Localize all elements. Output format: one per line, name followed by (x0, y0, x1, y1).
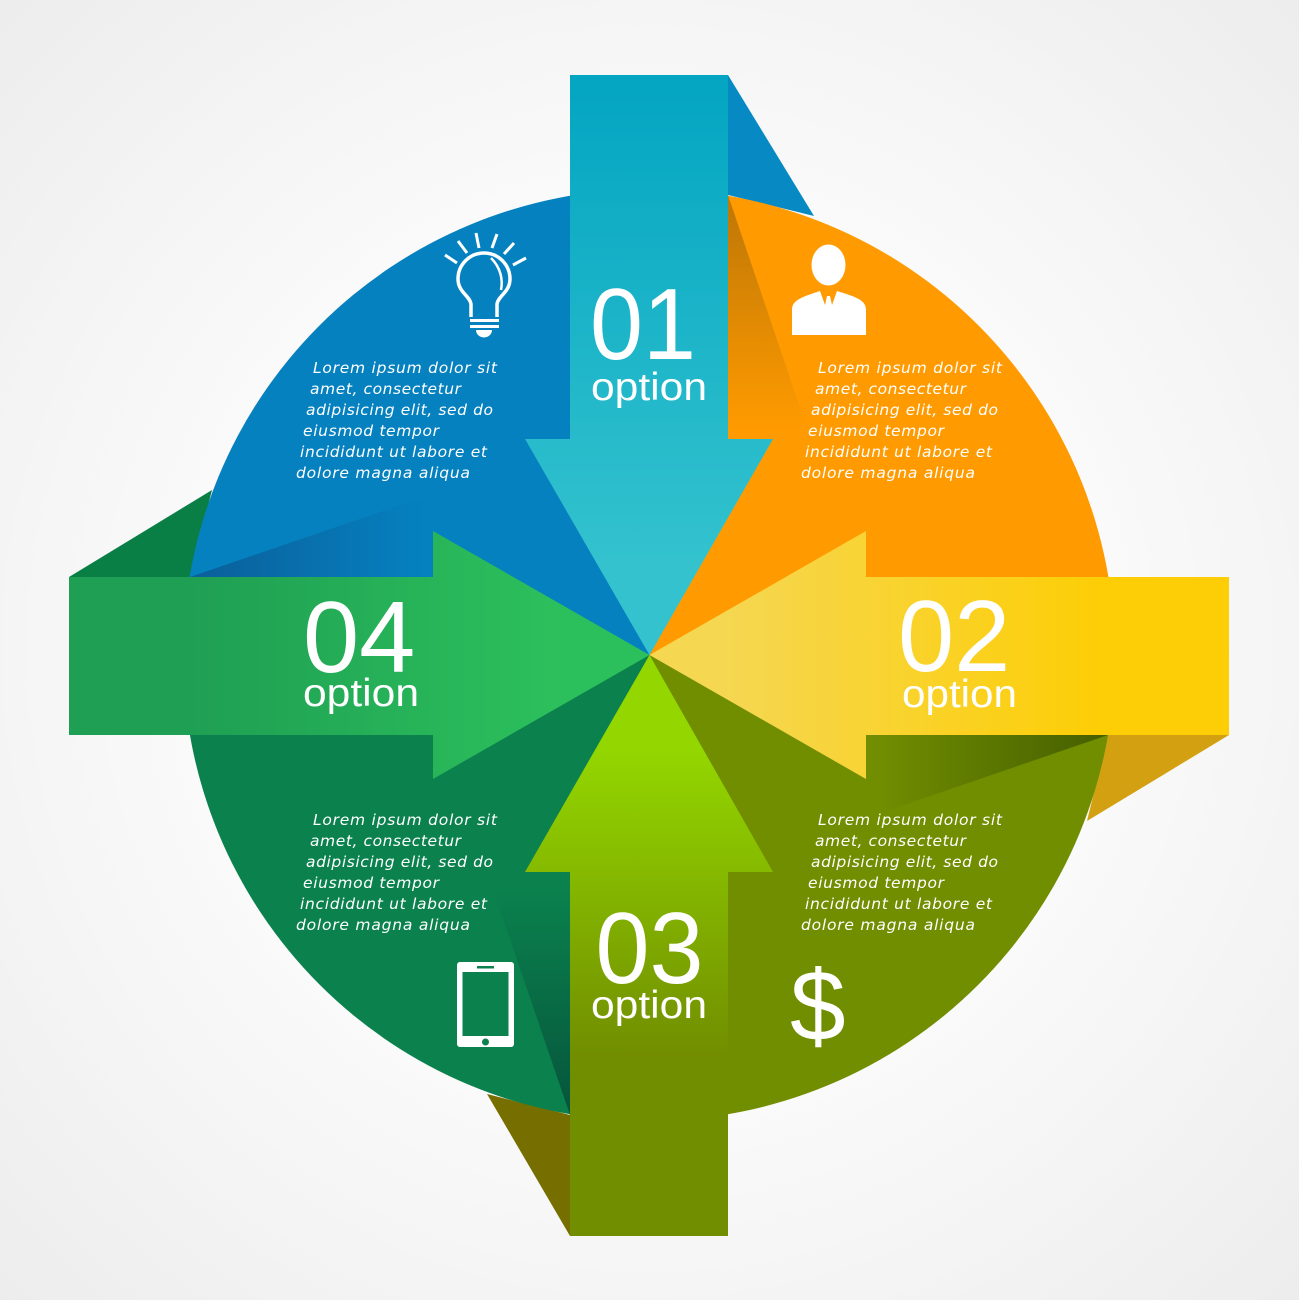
text block: green quadrant: amet, consectetur (310, 832, 463, 850)
fold: green tail behind left arrow (69, 490, 212, 577)
text block: orange quadrant: incididunt ut labore et (805, 443, 993, 461)
text block: green quadrant: adipisicing elit, sed do (306, 853, 493, 871)
text block: orange quadrant: eiusmod tempor (808, 422, 946, 440)
text block: green quadrant: dolore magna aliqua (296, 916, 470, 934)
fold shadow: olive (866, 735, 1108, 818)
sector: orange (649, 189, 1115, 655)
icon: dollar sign: $ (790, 950, 846, 1062)
label: option 01: option (591, 366, 707, 409)
sector: olive (649, 655, 1115, 1121)
panel: blue quadrant (183, 189, 649, 655)
text block: blue quadrant: Lorem ipsum dolor sit (313, 359, 498, 377)
sector: green (183, 655, 649, 1121)
text block: blue quadrant: adipisicing elit, sed do (306, 401, 493, 419)
text block: blue quadrant: dolore magna aliqua (296, 464, 470, 482)
number: 03: 03 (596, 893, 704, 1005)
icon: light bulb (445, 233, 526, 338)
text block: blue quadrant: amet, consectetur (310, 380, 463, 398)
text block: orange quadrant: dolore magna aliqua (801, 464, 975, 482)
number: 04: 04 (303, 582, 415, 694)
icon: business person (792, 244, 866, 335)
text block: blue quadrant: eiusmod tempor (303, 422, 441, 440)
panel: green quadrant (183, 655, 649, 1121)
text block: orange quadrant (801, 359, 1003, 482)
arrow: 02 right (650, 531, 1229, 779)
arrow: 01 top (525, 75, 773, 655)
text block: olive quadrant: dolore magna aliqua (801, 916, 975, 934)
text block: blue quadrant: incididunt ut labore et (300, 443, 488, 461)
label: option 04: option (303, 672, 419, 715)
fold shadow: orange (728, 195, 811, 440)
text block: orange quadrant: amet, consectetur (815, 380, 968, 398)
text block: green quadrant: Lorem ipsum dolor sit (313, 811, 498, 829)
text block: olive quadrant: adipisicing elit, sed do (811, 853, 998, 871)
icon: tablet (457, 962, 514, 1047)
text block: olive quadrant: Lorem ipsum dolor sit (818, 811, 1003, 829)
text block: olive quadrant: amet, consectetur (815, 832, 968, 850)
panel: orange quadrant (649, 189, 1115, 655)
sector: blue (183, 189, 649, 655)
number: 01: 01 (590, 269, 696, 381)
text block: blue quadrant (296, 359, 498, 482)
fold: amber tail behind right arrow (1087, 735, 1229, 821)
text block: green quadrant (296, 811, 498, 934)
text block: orange quadrant: adipisicing elit, sed do (811, 401, 998, 419)
arrow: 04 left (69, 531, 650, 779)
text block: olive quadrant (801, 811, 1003, 934)
arrow: 03 bottom (525, 655, 773, 1236)
text block: green quadrant: eiusmod tempor (303, 874, 441, 892)
fold: brown tail behind bottom arrow (487, 1094, 570, 1236)
text block: orange quadrant: Lorem ipsum dolor sit (818, 359, 1003, 377)
fold shadow: blue (190, 494, 433, 577)
label: option 02: option (902, 673, 1017, 716)
label: option 03: option (591, 984, 707, 1027)
panel: olive quadrant (649, 655, 1115, 1121)
fold: blue tail behind top arrow (728, 75, 814, 216)
number: 02: 02 (898, 581, 1010, 693)
text block: olive quadrant: eiusmod tempor (808, 874, 946, 892)
text block: green quadrant: incididunt ut labore et (300, 895, 488, 913)
text block: olive quadrant: incididunt ut labore et (805, 895, 993, 913)
fold shadow: green (487, 872, 570, 1115)
